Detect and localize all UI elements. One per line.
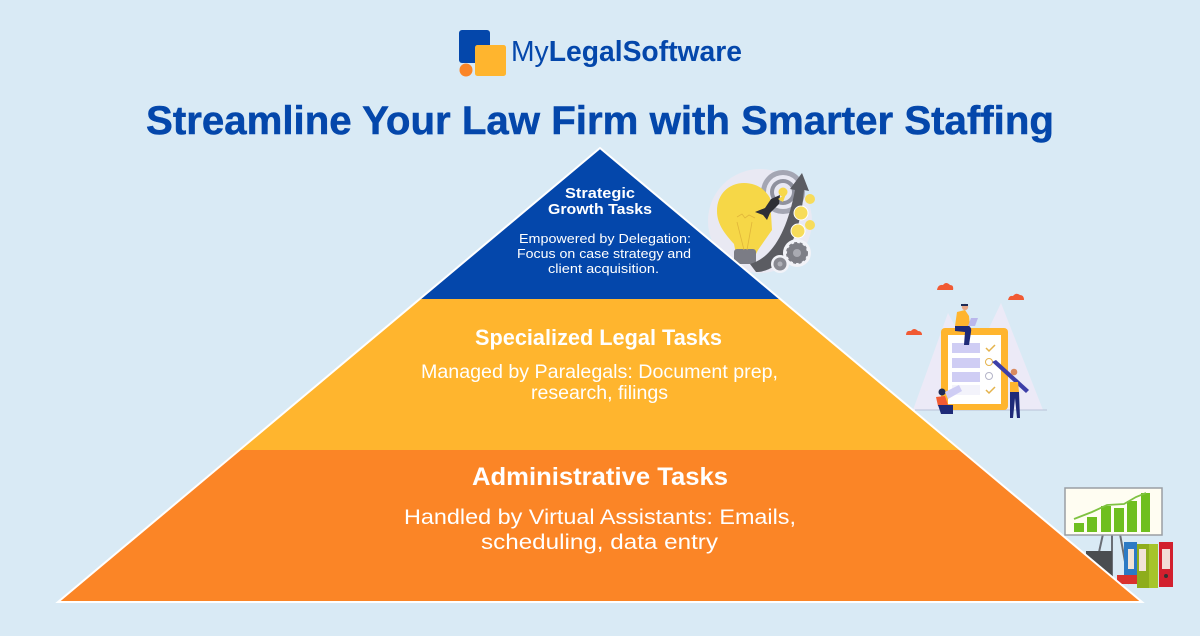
tier: administrative [58, 450, 1142, 602]
logo [459, 30, 742, 76]
tier: specialized [238, 299, 962, 450]
title: Streamline Your Law Firm with Smarter Staffing [146, 99, 1054, 143]
strategic tier text: client acquisition. [548, 261, 659, 276]
specialized tier text: Managed by Paralegals: Document prep, [421, 362, 778, 383]
strategic tier text [517, 185, 691, 276]
tier: strategic [420, 148, 781, 299]
specialized tier text: research, filings [531, 383, 668, 404]
icon: team with checklist [906, 283, 1047, 418]
pyramid [58, 148, 1142, 602]
administrative tier text: Administrative Tasks [472, 463, 728, 491]
logo mark [459, 30, 506, 76]
administrative tier text [404, 463, 796, 554]
specialized tier text [421, 325, 778, 404]
logo wordmark: MyLegalSoftware [511, 36, 742, 68]
pyramid outline [58, 148, 1142, 602]
strategic tier text: Growth Tasks [548, 201, 652, 218]
icon: lightbulb, target and growth arrow [708, 169, 815, 273]
strategic tier text: Empowered by Delegation: [519, 231, 691, 246]
strategic tier text: Focus on case strategy and [517, 246, 691, 261]
strategic tier text: Strategic [565, 185, 635, 202]
administrative tier text: scheduling, data entry [481, 530, 718, 554]
specialized tier text: Specialized Legal Tasks [475, 325, 722, 350]
icon: chart board and binders [1065, 488, 1173, 588]
administrative tier text: Handled by Virtual Assistants: Emails, [404, 505, 796, 529]
